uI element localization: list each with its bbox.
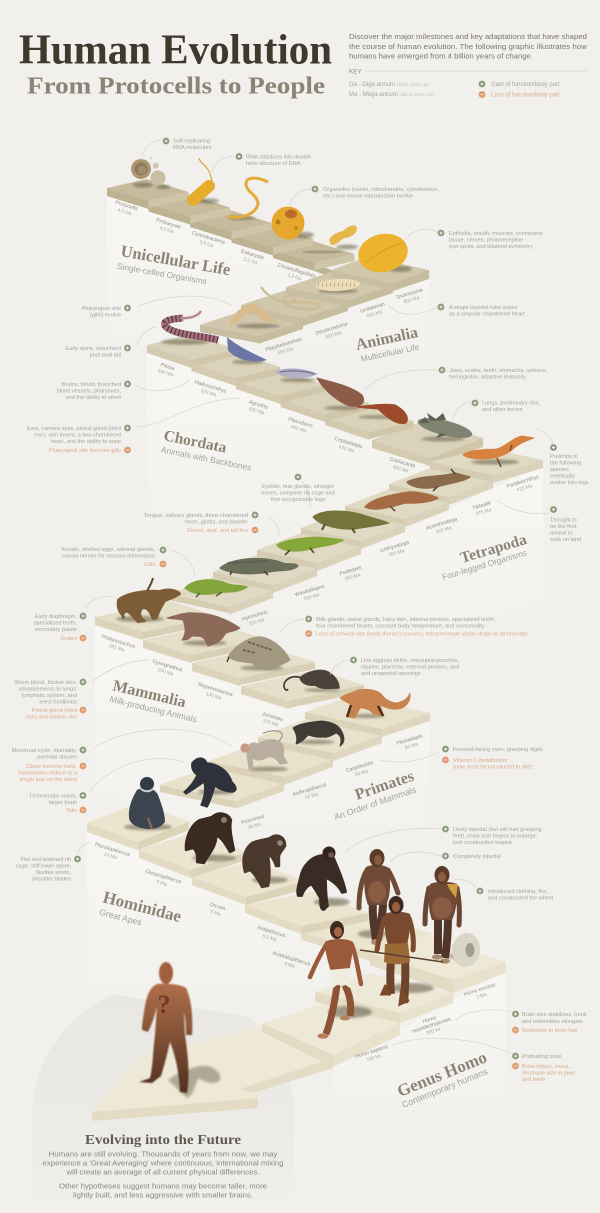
section title: mammalia bbox=[109, 677, 203, 725]
icon: ichthyostega bbox=[313, 511, 389, 533]
callout: warm blood bbox=[14, 660, 150, 720]
stairs: animalia bbox=[200, 257, 429, 344]
section title: primates bbox=[327, 768, 420, 822]
section title: mammalia: Milk-producing Animals bbox=[109, 694, 199, 725]
stage labels: primates: 65 Ma bbox=[354, 768, 369, 778]
callout: flat rib cage: shoulder blades bbox=[32, 876, 71, 882]
stage labels: primates: Plesiadapis bbox=[396, 733, 424, 747]
callout: protruding nose: decrease size in jaws bbox=[522, 1070, 575, 1076]
text block: introduction bbox=[349, 32, 588, 60]
panel: arch behind the future human bbox=[32, 985, 294, 1213]
callout: organelles bbox=[290, 186, 439, 205]
callout: live births bbox=[330, 657, 459, 677]
stage labels: tetrapoda: 365 Ma bbox=[435, 525, 452, 535]
callout: menstrual cycle: Claws become nails, bbox=[26, 764, 77, 770]
stage labels: hominidae: Orrorin bbox=[209, 902, 226, 912]
callout: eyelids bbox=[261, 474, 335, 508]
callout: milk glands: Loss of cervical ribs (body thorax's convex), tetrachromate vision drops to dichromatic bbox=[316, 632, 528, 638]
stage labels: chordata: 525 Ma bbox=[200, 388, 217, 399]
callout: menstrual cycle: single pair on the chest bbox=[19, 777, 77, 783]
icon: ardipithecus bbox=[358, 849, 398, 945]
stage labels: unicellular: Protocells bbox=[114, 200, 139, 212]
icon: tiktaalik bbox=[407, 469, 470, 491]
stage labels: primates: 35 Ma bbox=[247, 821, 262, 831]
section title: chordata bbox=[160, 427, 256, 473]
text block: future: Humans are still evolving. Thousands of years from now, we may bbox=[48, 1152, 278, 1158]
callout: pharyngeal slits: Pharyngeal slits bbox=[82, 306, 121, 312]
icon: hylonomus bbox=[185, 580, 247, 597]
stage labels: tetrapoda: 330 Ma bbox=[248, 617, 265, 627]
stage labels: animalia: Platyhelminthes bbox=[265, 337, 303, 353]
stage labels: chordata: 460 Ma bbox=[290, 424, 307, 435]
stage labels: genus homo: 2 Ma bbox=[476, 992, 488, 1001]
icon: pikaia bbox=[161, 311, 218, 345]
icon: panderichthys bbox=[463, 436, 534, 467]
stage labels: mammalia: 170 Ma bbox=[262, 718, 279, 729]
icon: protocells bbox=[131, 156, 170, 189]
icon: pederpes bbox=[277, 537, 343, 555]
stage labels: chordata: 420 Ma bbox=[392, 464, 409, 475]
callout: menstrual cycle: mammaries reduce to a bbox=[18, 770, 78, 776]
icon: repenomamus bbox=[227, 637, 290, 670]
stage labels: unicellular: Eukaryote bbox=[240, 249, 265, 261]
icon: australopithecus bbox=[425, 866, 475, 964]
heading: evolving into the future: Evolving into the Future bbox=[85, 1133, 241, 1148]
callout: first on land bbox=[497, 500, 581, 543]
text block: future: lightly built, and less aggressive with smaller brains. bbox=[73, 1192, 253, 1200]
callout: forward eyes bbox=[380, 746, 543, 770]
stage labels: chordata: 540 Ma bbox=[157, 368, 174, 379]
callout: first on land: be the first bbox=[550, 524, 577, 530]
stage labels: genus homo: 300 ka bbox=[426, 1026, 441, 1037]
stage labels: hominidae: Ardipithecus bbox=[256, 925, 286, 939]
callout: brains bbox=[57, 380, 190, 401]
callout: first on land: animal to bbox=[550, 530, 573, 536]
icon: juramaia bbox=[284, 670, 340, 692]
callout: brain size bbox=[455, 1010, 587, 1034]
stage labels: animalia: 650 Ma bbox=[366, 309, 383, 319]
text block: future: will create an average of all current physical differences. bbox=[65, 1170, 260, 1176]
callout: brains: blood vessels, pharynxes, bbox=[57, 388, 121, 394]
callout: RNA molecules: RNA molecules bbox=[173, 145, 211, 151]
text block: future: Other hypotheses suggest humans may become taller, more bbox=[59, 1184, 267, 1190]
icon: prokaryote bbox=[193, 158, 219, 204]
text block: future bbox=[42, 1152, 284, 1200]
callout: menstrual cycle: parental abuses bbox=[37, 754, 77, 760]
callout: jaws bbox=[365, 367, 548, 390]
stage labels: tetrapoda bbox=[241, 474, 542, 629]
icon: stone wheel bbox=[450, 931, 482, 969]
callout: protruding nose: and teeth bbox=[522, 1077, 545, 1083]
icon: placoderm bbox=[317, 378, 364, 410]
icon: orrorin bbox=[297, 846, 350, 910]
stage labels: unicellular: 4.3 Ga bbox=[117, 207, 132, 217]
callout: ears: Ears, camera eyes, pineal gland (third bbox=[27, 426, 121, 432]
section title: hominidae: Hominidae bbox=[101, 887, 184, 926]
stairs: tetrapoda bbox=[169, 448, 543, 615]
callout: completely bipedal: Completely bipedal bbox=[453, 854, 501, 860]
callout: live births: and urogenital openings bbox=[361, 671, 421, 677]
panel: wall under mammalia and primates stairs bbox=[95, 622, 430, 880]
stage labels: unicellular: 2.2 Ga bbox=[243, 256, 258, 266]
stage labels: chordata: Agnatha bbox=[248, 399, 269, 411]
callout: live births: Live eggless births, marsupial pouches, bbox=[361, 658, 459, 664]
text block: introduction: the course of human evolution. The following graphic illustrates how bbox=[349, 42, 588, 51]
stairs: hominidae bbox=[87, 803, 434, 961]
callout: protruding nose: Protruding nose bbox=[522, 1054, 562, 1060]
callout: spine bbox=[65, 327, 156, 358]
callout: clothing fire wheel bbox=[455, 879, 553, 902]
icon: homo erectus with spear bbox=[360, 896, 443, 1004]
section title: unicellular life: Single-celled Organisms bbox=[116, 261, 208, 286]
callout: tongue: Tongue, salivary glands, three-chambered bbox=[144, 513, 248, 519]
stage labels: mammalia: Phthinosuchus bbox=[101, 634, 136, 650]
stage labels: chordata bbox=[157, 362, 416, 476]
callout: milk glands: four chambered hearts, constant body temperature, and nocturnality bbox=[316, 624, 485, 630]
callout: completely bipedal bbox=[390, 852, 501, 862]
callout: ears: eye), skin lovers, a two-chambered bbox=[34, 432, 121, 438]
callout: prelimbs: evolve into legs bbox=[550, 480, 589, 486]
stage labels: chordata: 520 Ma bbox=[248, 406, 265, 417]
section title: genus homo: Contemporary humans bbox=[400, 1066, 489, 1110]
callout: eyelids: bones, complete rib cage and bbox=[261, 490, 335, 496]
callout: forward eyes: Vitamin C metabolism bbox=[453, 758, 508, 764]
stage labels: genus homo: Homo erectus bbox=[463, 982, 497, 998]
callout: epithelia: Epithelia, mouth, muscles, connective bbox=[449, 231, 543, 237]
icon: cephalaspis bbox=[357, 404, 407, 424]
icon: plesiadapis bbox=[340, 689, 410, 718]
stage labels: animalia: 800 Ma bbox=[403, 295, 420, 305]
stage labels: tetrapoda: 360 Ma bbox=[388, 548, 405, 558]
callout: keratin: cranial nerves for sensory information bbox=[62, 554, 155, 560]
callout: prelimbs bbox=[535, 429, 589, 486]
title bbox=[19, 27, 332, 99]
icon: future human with question mark bbox=[139, 962, 220, 1098]
callout: menstrual cycle: Menstrual cycle, diurnality, bbox=[12, 748, 77, 754]
callout: ears bbox=[27, 398, 240, 454]
callout: likely bipedal: feet), brain size begins to enlarge, bbox=[453, 834, 538, 840]
stage labels: animalia: Deuterostome bbox=[315, 321, 349, 337]
stage labels: chordata: Pikaia bbox=[160, 362, 175, 372]
stage labels: mammalia: Repenomamus bbox=[197, 682, 234, 698]
stage labels: unicellular: Cyanobacteria bbox=[191, 230, 226, 246]
stage labels: primates: Carpolestes bbox=[345, 760, 374, 774]
stage labels: primates: Proconsul bbox=[241, 814, 265, 826]
callout: heart: A single layered tube arises bbox=[449, 305, 518, 311]
callout: likely bipedal: Likely bipedal (but still had grasping bbox=[453, 827, 542, 833]
callout: DNA: helix structure of DNA bbox=[246, 161, 301, 167]
callout: protruding nose bbox=[392, 1038, 575, 1083]
callout: trichromatic vision bbox=[29, 759, 184, 814]
callout: warm blood: Pineal gland (third bbox=[32, 708, 77, 714]
stage labels: mammalia bbox=[99, 634, 284, 729]
stage labels: primates: 50 Ma bbox=[304, 791, 319, 801]
legend: key: Gain of function/body part bbox=[491, 82, 560, 88]
section title: genus homo: Genus Homo bbox=[394, 1048, 490, 1101]
stage labels: hominidae: 15 Ma bbox=[103, 851, 118, 861]
icon: choanoflagellate bbox=[302, 225, 358, 254]
panel: wall under tetrapoda stairs bbox=[229, 465, 543, 650]
callout: warm blood: eye) and lumbar ribs bbox=[26, 714, 77, 720]
section title: unicellular life: Unicellular Life bbox=[119, 241, 232, 279]
section title: mammalia: Mammalia bbox=[111, 677, 188, 711]
stage labels: hominidae bbox=[92, 842, 311, 974]
section title: tetrapoda: Tetrapoda bbox=[458, 531, 529, 567]
stage labels: primates: Anthropithecus bbox=[292, 782, 328, 798]
stage labels: tetrapoda: 375 Ma bbox=[475, 507, 492, 517]
callout: protruding nose: Brow ridges, snout, bbox=[522, 1064, 570, 1070]
stage labels: hominidae: Pierolapithecus bbox=[94, 842, 131, 858]
icon: dickinsonia bbox=[355, 229, 412, 277]
stage labels: tetrapoda: Acanthostega bbox=[425, 516, 458, 532]
callout: diaphragm bbox=[34, 597, 113, 642]
icon: carpolestes bbox=[293, 721, 344, 746]
callout: warm blood: Warm blood, thicker skin, bbox=[14, 680, 77, 686]
icon: black ape bbox=[184, 758, 236, 807]
stage labels: hominidae: 9 Ma bbox=[155, 879, 168, 888]
stairs: mammalia bbox=[95, 601, 364, 709]
icon: ouranopithecus bbox=[243, 836, 288, 887]
stage labels: tetrapoda: Tiktaalik bbox=[472, 500, 492, 512]
icon: agnatha bbox=[275, 368, 318, 382]
callout: warm blood: erect hindlimbs bbox=[39, 700, 77, 706]
callout: milk glands bbox=[280, 616, 528, 638]
callout: organelles: etc.) and sexual reproduction evolve bbox=[323, 194, 413, 200]
stage labels: chordata: Cephalaspis bbox=[333, 436, 363, 450]
icon: haikouichthys bbox=[227, 337, 267, 364]
stage labels: tetrapoda: Panderichthys bbox=[506, 474, 540, 490]
callout: DNA: RNA stabilizes into double bbox=[246, 154, 311, 160]
callout: menstrual cycle bbox=[12, 729, 232, 783]
icon: deuterostome worm bbox=[261, 287, 319, 309]
callout: jaws: hemoglobin, adaptive immunity bbox=[449, 374, 526, 380]
section title: chordata: Animals with Backbones bbox=[160, 444, 252, 473]
callout: diaphragm: Early diaphragm, bbox=[35, 614, 77, 620]
callout: warm blood: lymphatic system, and bbox=[22, 693, 77, 699]
stage labels: tetrapoda: Hylonomus bbox=[241, 609, 269, 623]
stage labels: animalia: Unilaterian bbox=[360, 301, 386, 315]
callout: warm blood: advancements to lungs' bbox=[18, 686, 77, 692]
callout: spine: post anal tail bbox=[90, 352, 121, 358]
callout: brain size: and extremities elongate bbox=[522, 1019, 583, 1025]
icon: unilaterian grub bbox=[316, 278, 360, 293]
callout: trichromatic vision: larger brain bbox=[49, 800, 77, 806]
stage labels: tetrapoda: 350 Ma bbox=[344, 572, 361, 582]
stage labels: genus homo: Homo sapiens bbox=[355, 1044, 389, 1060]
callout: trichromatic vision: Tails bbox=[66, 808, 77, 814]
title: Human Evolution bbox=[19, 27, 332, 73]
icon: grey monkey bbox=[240, 731, 288, 771]
stage labels: chordata: 420 Ma bbox=[338, 444, 355, 455]
icon: acanthostega bbox=[365, 492, 438, 511]
callout: heart bbox=[388, 304, 525, 318]
panel: wall under genus homo stairs bbox=[330, 970, 506, 1130]
callout: organelles: Organelles (nuclei, mitochondria, cytoskeleton, bbox=[323, 187, 439, 193]
text block: introduction: humans have emerged from 4 billion years of change. bbox=[349, 52, 533, 60]
legend: key: KEY bbox=[349, 68, 363, 76]
stage labels: mammalia: 130 Ma bbox=[205, 691, 222, 702]
callout: brains: and the ability to smell bbox=[66, 395, 121, 401]
callout: forward eyes: (now must be introduced in diet) bbox=[453, 764, 533, 770]
callout: tongue bbox=[144, 512, 280, 535]
legend: key bbox=[349, 68, 587, 98]
callout: ears: Pharyngeal slits become gills bbox=[49, 448, 121, 454]
stage labels: hominidae: 6 Ma bbox=[209, 909, 222, 918]
stairs: primates bbox=[160, 696, 430, 809]
section title: chordata: Chordata bbox=[162, 427, 228, 457]
callout: likely bipedal: tool construction begins bbox=[453, 840, 512, 846]
legend: key: Ma - Mega annum million years ago bbox=[349, 92, 434, 98]
icon: platyhelminthes bbox=[230, 304, 280, 328]
callout: prelimbs: eventually bbox=[550, 474, 575, 480]
stage labels: animalia: 550 Ma bbox=[277, 346, 294, 356]
callout: tongue: Dorsal, anal, and tail fins bbox=[187, 528, 248, 534]
callout: pharyngeal slits bbox=[82, 296, 232, 318]
icon: cyanobacteria bbox=[228, 178, 268, 220]
section title: animalia: Animalia bbox=[354, 324, 420, 354]
callout: flat rib cage: Flat and widened rib bbox=[21, 857, 71, 863]
stage labels: primates bbox=[241, 733, 426, 833]
callout: clothing fire wheel: and constructed the wheel bbox=[488, 896, 553, 902]
stage labels: primates: 80 Ma bbox=[404, 741, 419, 751]
stage labels: unicellular: Prokaryote bbox=[155, 217, 181, 231]
stage labels: animalia: 600 Ma bbox=[325, 330, 342, 340]
callout: brain size: Reduction in body hair bbox=[522, 1028, 578, 1034]
callout: eyelids: first recognizable legs bbox=[271, 497, 325, 503]
callout: diaphragm: Scales bbox=[60, 636, 77, 642]
callout: forward eyes: Forward-facing eyes, grasping digits bbox=[453, 747, 543, 753]
icon: coelacanth bbox=[416, 413, 474, 442]
section title: primates: An Order of Mammals bbox=[333, 784, 418, 822]
stage labels: unicellular: 4.0 Ga bbox=[159, 225, 174, 235]
icon: eukaryote bbox=[272, 206, 314, 240]
stairs: unicellular life bbox=[107, 179, 354, 277]
callout: ears: heart, and the ability to taste bbox=[51, 439, 121, 445]
callout: tongue: heart, glottis, and bladder bbox=[185, 520, 248, 526]
callout: first on land: walk on land bbox=[549, 537, 581, 543]
stage labels: hominidae: Australopithecus bbox=[272, 950, 311, 968]
icon: pierolapithecus bbox=[186, 813, 236, 863]
panel: wall under hominidae stairs bbox=[87, 828, 340, 1025]
stage labels: mammalia: Cynognathus bbox=[151, 659, 183, 674]
stage labels: mammalia: 265 Ma bbox=[108, 643, 125, 654]
text block: future: experience a 'Great Averaging' where continuous, international mixing bbox=[42, 1160, 284, 1168]
callout: RNA molecules: Self-replicating bbox=[173, 138, 210, 144]
stage labels: hominidae: Ouranopithecus bbox=[145, 869, 182, 885]
callout: likely bipedal bbox=[345, 826, 542, 852]
callout: flat rib cage: cage, stiff lower spine, bbox=[16, 864, 71, 870]
stage labels: unicellular: Choanoflagellate bbox=[276, 262, 316, 280]
callout: pharyngeal slits: (gills) evolve bbox=[90, 312, 121, 318]
section title: primates: Primates bbox=[353, 768, 416, 804]
callout: epithelia: tissue, nerves, photoreceptive bbox=[449, 238, 523, 244]
title: From Protocells to People bbox=[27, 73, 325, 99]
callout: DNA bbox=[212, 153, 311, 172]
stage labels: chordata: Haikouichthys bbox=[194, 379, 227, 395]
stage labels: mammalia: 250 Ma bbox=[157, 667, 174, 678]
callout: diaphragm: specialized teeth, bbox=[34, 620, 77, 626]
callout: spine: Early spine, notochord bbox=[65, 346, 121, 352]
callout: trichromatic vision: Trichromatic vision, bbox=[29, 794, 77, 800]
stage labels: unicellular bbox=[112, 200, 316, 286]
callout: epithelia: eye-spots, and bilateral symmetry bbox=[449, 244, 533, 250]
stage labels: hominidae: 4 Ma bbox=[283, 961, 296, 970]
callout: epithelia bbox=[405, 229, 543, 250]
callout: prelimbs: species bbox=[550, 467, 569, 473]
callout: lungs: and other bones bbox=[482, 407, 523, 413]
callout: prelimbs: Prelimbs in bbox=[550, 454, 578, 460]
callout: keratin: Keratin, shelled eggs, adrenal glands, bbox=[61, 547, 155, 553]
stage labels: animalia bbox=[265, 287, 425, 360]
legend: key: Loss of function/body part bbox=[491, 92, 560, 98]
callout: RNA molecules bbox=[142, 138, 211, 160]
stage labels: tetrapoda: Pederpes bbox=[339, 565, 363, 577]
stage labels: tetrapoda: Westlothiana bbox=[294, 584, 325, 598]
stage labels: tetrapoda: Ichthyostega bbox=[379, 540, 410, 554]
section title: hominidae: Great Apes bbox=[98, 907, 143, 928]
callout: keratin bbox=[61, 547, 195, 577]
callout: brains: Brains, blood, branched bbox=[62, 382, 121, 388]
icon: future human with question mark: ? bbox=[158, 990, 170, 1019]
icon: homo sapiens bbox=[310, 921, 372, 1039]
callout: flat rib cage bbox=[16, 843, 90, 882]
icon: cynognathus bbox=[167, 613, 240, 646]
stage labels: genus homo bbox=[355, 982, 499, 1066]
callout: eyelids: Eyelids, tear glands, stronger bbox=[262, 484, 334, 490]
legend: key: Ga - Giga annum billion years ago bbox=[349, 82, 430, 88]
stage labels: chordata: Placoderm bbox=[287, 416, 314, 430]
stage labels: tetrapoda: 338 Ma bbox=[303, 592, 320, 602]
icon: westlothiana bbox=[220, 559, 298, 575]
panel: wall under unicellular and animalia stairs bbox=[107, 192, 429, 385]
callout: heart: as a singular chambered heart bbox=[449, 312, 525, 318]
stairs: chordata bbox=[147, 334, 483, 467]
callout: diaphragm: secondary palate bbox=[34, 627, 77, 633]
stage labels: genus homo: Homo bbox=[422, 1015, 437, 1025]
section title: tetrapoda: Four-legged Organisms bbox=[441, 547, 528, 582]
stage labels: chordata: Coelacanth bbox=[389, 456, 416, 470]
callout: lungs: Lungs, preliminary ribs, bbox=[482, 400, 540, 406]
icon: sitting ape bbox=[124, 777, 172, 830]
stage labels: unicellular: 1.2 Ga bbox=[287, 272, 302, 282]
callout: first on land: Thought to bbox=[550, 518, 577, 524]
callout: brain size: Brain size stabilizes, trunk bbox=[522, 1012, 587, 1018]
stage labels: hominidae: 5.2 Ma bbox=[261, 933, 278, 943]
callout: jaws: Jaws, scales, teeth, stomachs, spleens, bbox=[449, 368, 548, 374]
callout: keratin: Gills bbox=[144, 562, 155, 568]
callout: prelimbs: the following bbox=[550, 460, 581, 466]
callout: flat rib cage: flexible wrists, bbox=[36, 870, 71, 876]
stage labels: tetrapoda: 415 Ma bbox=[516, 483, 533, 493]
stage labels: genus homo: neanderthalensis bbox=[411, 1017, 452, 1035]
stage labels: animalia: Dickinsonia bbox=[396, 287, 424, 301]
callout: clothing fire wheel: Introduced clothing, fire, bbox=[488, 889, 548, 895]
stage labels: unicellular: 3.5 Ga bbox=[199, 239, 214, 249]
text block: introduction: Discover the major milestones and key adaptations that have shaped bbox=[349, 32, 587, 41]
icon: phthinosuchus bbox=[116, 578, 180, 622]
callout: milk glands: Milk glands, sweat glands, hairy skin, internal penises, specialized teeth, bbox=[316, 617, 496, 623]
stage labels: mammalia: Juramaia bbox=[261, 711, 284, 723]
stairs: genus homo and future platform bbox=[92, 935, 506, 1121]
section title: animalia: Multicellular Life bbox=[360, 342, 421, 364]
panel: wall under chordata stairs bbox=[147, 350, 483, 560]
callout: live births: nipples, placenta, external penises, and bbox=[361, 664, 459, 670]
section title: tetrapoda bbox=[436, 531, 531, 582]
callout: lungs bbox=[453, 400, 540, 418]
stage labels: genus homo: 160 ka bbox=[366, 1053, 382, 1063]
